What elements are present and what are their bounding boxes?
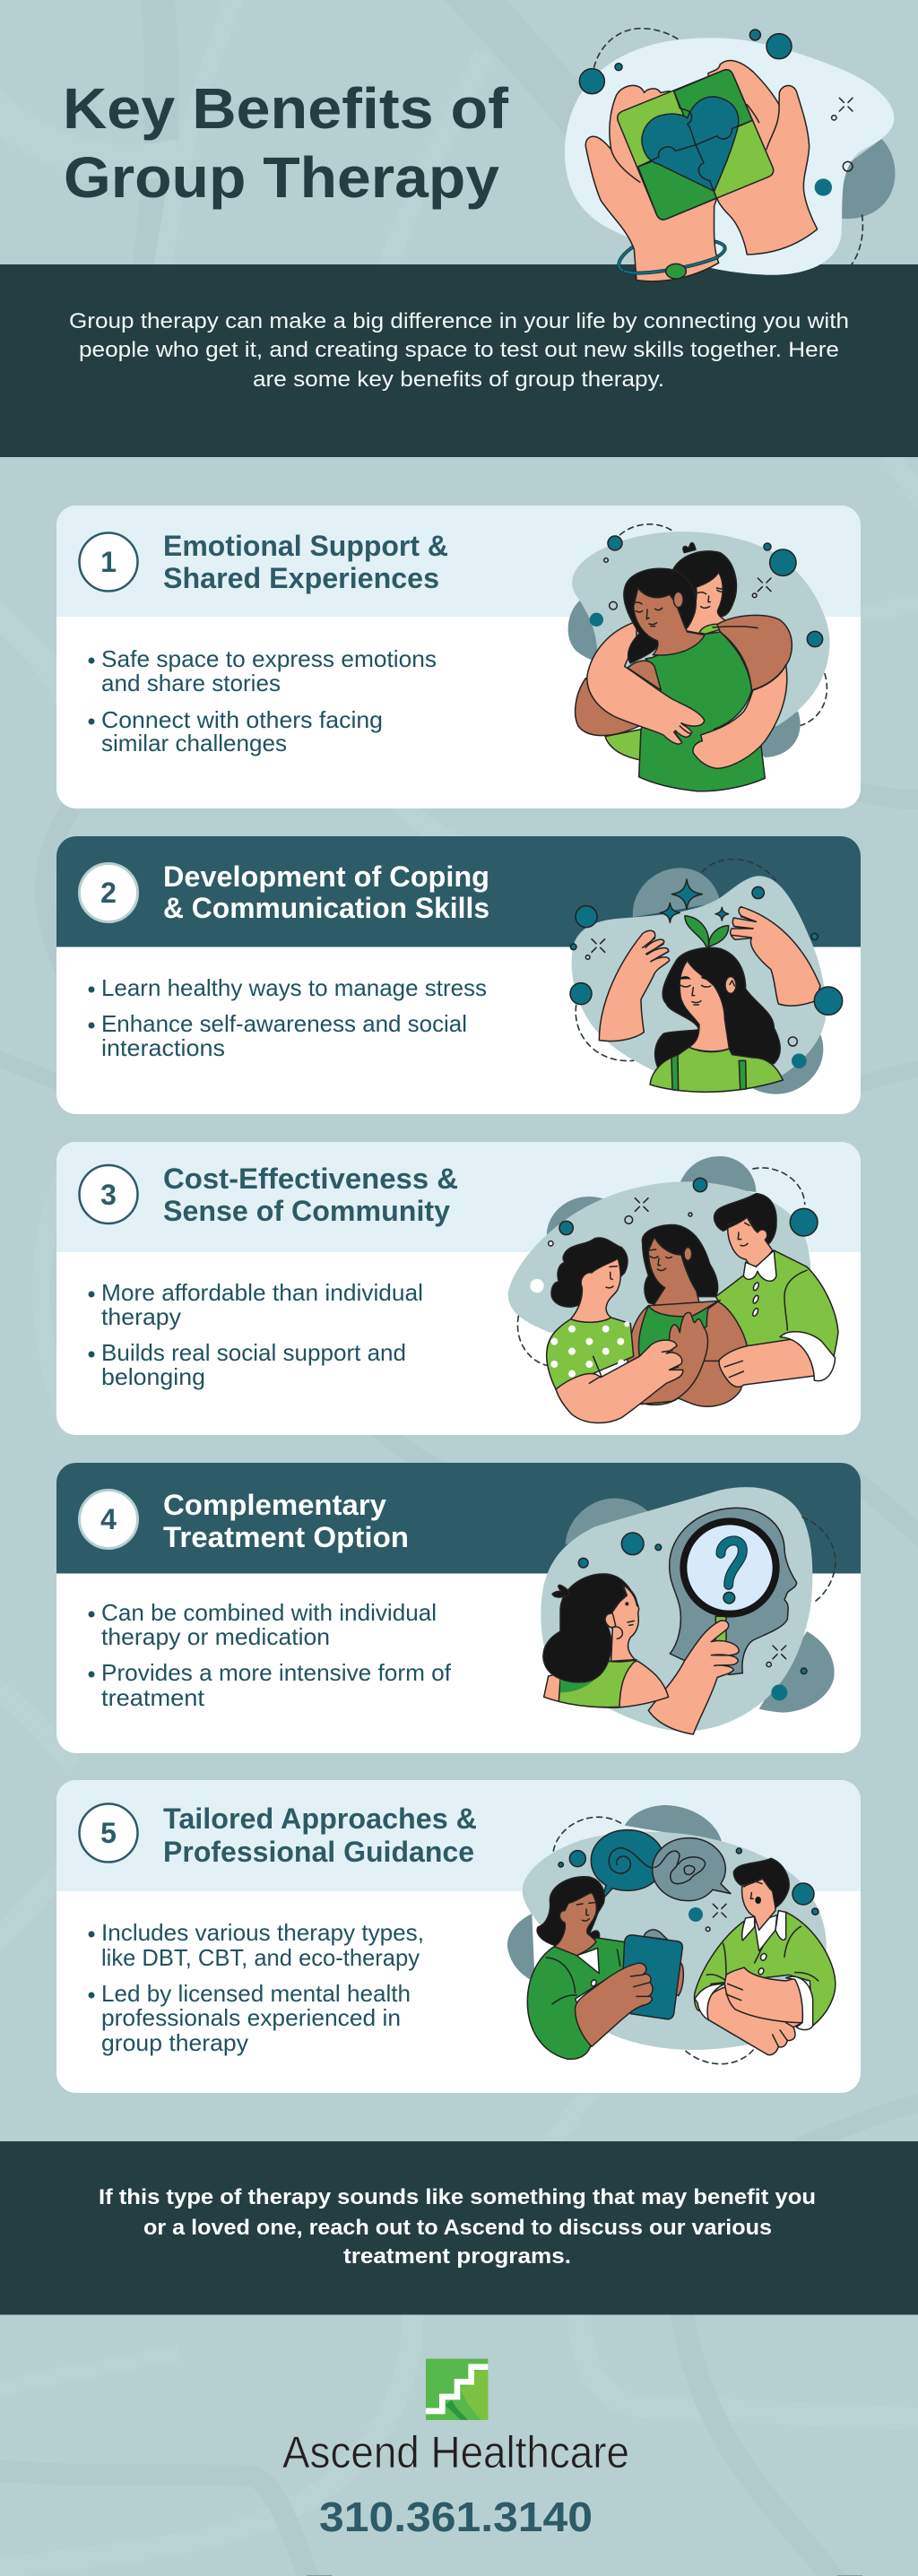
bullets 4: Can be combined with individual	[101, 1599, 437, 1626]
illustration: woman with sprout and hands	[570, 860, 843, 1094]
heading 5: Professional Guidance	[163, 1836, 474, 1868]
number badge 3	[79, 1165, 138, 1223]
bullets 5: professionals experienced in	[101, 2004, 401, 2031]
intro text: are some key benefits of group therapy.	[253, 367, 664, 392]
call to action text: or a loved one, reach out to Ascend to discuss our various	[143, 2216, 772, 2240]
number badge 1	[79, 532, 138, 592]
illustration: three friends supporting each other	[508, 1156, 838, 1423]
band: call to action	[0, 2141, 918, 2314]
card 2 header bar	[56, 836, 861, 947]
bullets 3: More affordable than individual	[101, 1279, 423, 1306]
logo mark: green square with white stairs	[426, 2359, 488, 2420]
panel: card 5	[56, 1780, 861, 2093]
bullets 4: Provides a more intensive form of	[101, 1659, 452, 1686]
number badge 4	[79, 1490, 138, 1549]
bullets 3	[88, 1279, 423, 1390]
number badge 1: 1	[100, 546, 117, 578]
heading 5	[163, 1802, 477, 1868]
bullets 2	[88, 974, 487, 1061]
bullets 1: and share stories	[101, 670, 281, 696]
illustration: two people hugging	[568, 524, 830, 791]
bullets 3: belonging	[101, 1363, 205, 1390]
bullets 1	[88, 645, 437, 756]
heading 3: Sense of Community	[163, 1195, 450, 1227]
phone number: 310.361.3140	[319, 2494, 593, 2540]
logo wordmark: Ascend Healthcare	[282, 2427, 629, 2477]
band: intro background	[0, 264, 918, 457]
illustration: woman with magnifier and question mark	[541, 1487, 836, 1734]
card 4 header bar	[56, 1463, 861, 1574]
bullets 4: treatment	[101, 1684, 205, 1711]
bullets 2: interactions	[101, 1034, 225, 1061]
number badge 4: 4	[100, 1503, 117, 1535]
bullets 5: group therapy	[101, 2029, 248, 2056]
card 3 header bar	[56, 1142, 861, 1252]
bullets 4	[88, 1599, 452, 1711]
bullets 1: Connect with others facing	[101, 706, 383, 733]
card 1 header bar	[56, 506, 861, 617]
heading 1	[163, 530, 448, 594]
bullets 5	[88, 1919, 424, 2056]
number badge 3: 3	[100, 1179, 117, 1211]
panel: card 4	[56, 1463, 861, 1753]
bullets 3: Builds real social support and	[101, 1339, 406, 1366]
intro text: Group therapy can make a big difference in your life by connecting you with	[69, 309, 849, 333]
title: Group Therapy	[64, 145, 499, 210]
bullets 3: therapy	[101, 1303, 181, 1330]
bullets 2: Enhance self-awareness and social	[101, 1010, 467, 1037]
bullets 5: Includes various therapy types,	[101, 1919, 424, 1946]
bullets 5: like DBT, CBT, and eco-therapy	[101, 1944, 420, 1971]
intro text	[69, 309, 849, 392]
bullets 4: therapy or medication	[101, 1623, 330, 1650]
card 5 header bar	[56, 1780, 861, 1891]
heading 1: Shared Experiences	[163, 562, 439, 594]
title: Key Benefits of	[63, 76, 509, 141]
call to action text: If this type of therapy sounds like something that may benefit you	[99, 2185, 816, 2209]
number badge 2	[79, 864, 138, 921]
heading 4: Complementary	[163, 1489, 386, 1521]
panel: card 3	[56, 1142, 861, 1435]
number badge 5	[79, 1803, 138, 1863]
heading 3: Cost-Effectiveness &	[163, 1163, 458, 1195]
number badge 2: 2	[100, 877, 117, 909]
heading 4	[163, 1489, 409, 1553]
heading 2: Development of Coping	[163, 860, 489, 893]
bullets 1: Safe space to express emotions	[101, 645, 437, 672]
intro text: people who get it, and creating space to test out new skills together. Here	[79, 338, 839, 362]
heading 2	[163, 860, 489, 924]
bullets 5: Led by licensed mental health	[101, 1980, 411, 2007]
panel: card 2	[56, 836, 861, 1114]
bullets 1: similar challenges	[101, 730, 287, 756]
heading 3	[163, 1163, 458, 1227]
illustration: hands holding heart puzzle	[565, 29, 895, 281]
call to action text	[99, 2185, 816, 2269]
heading 1: Emotional Support &	[163, 530, 448, 562]
heading 5: Tailored Approaches &	[163, 1802, 477, 1835]
call to action text: treatment programs.	[343, 2244, 571, 2269]
number badge 5: 5	[100, 1817, 117, 1849]
heading 4: Treatment Option	[163, 1521, 409, 1553]
bullets 2: Learn healthy ways to manage stress	[101, 974, 487, 1001]
heading 2: & Communication Skills	[163, 892, 489, 924]
illustration: therapist and patient talking	[507, 1805, 836, 2064]
title	[63, 76, 509, 210]
panel: card 1	[56, 506, 861, 808]
